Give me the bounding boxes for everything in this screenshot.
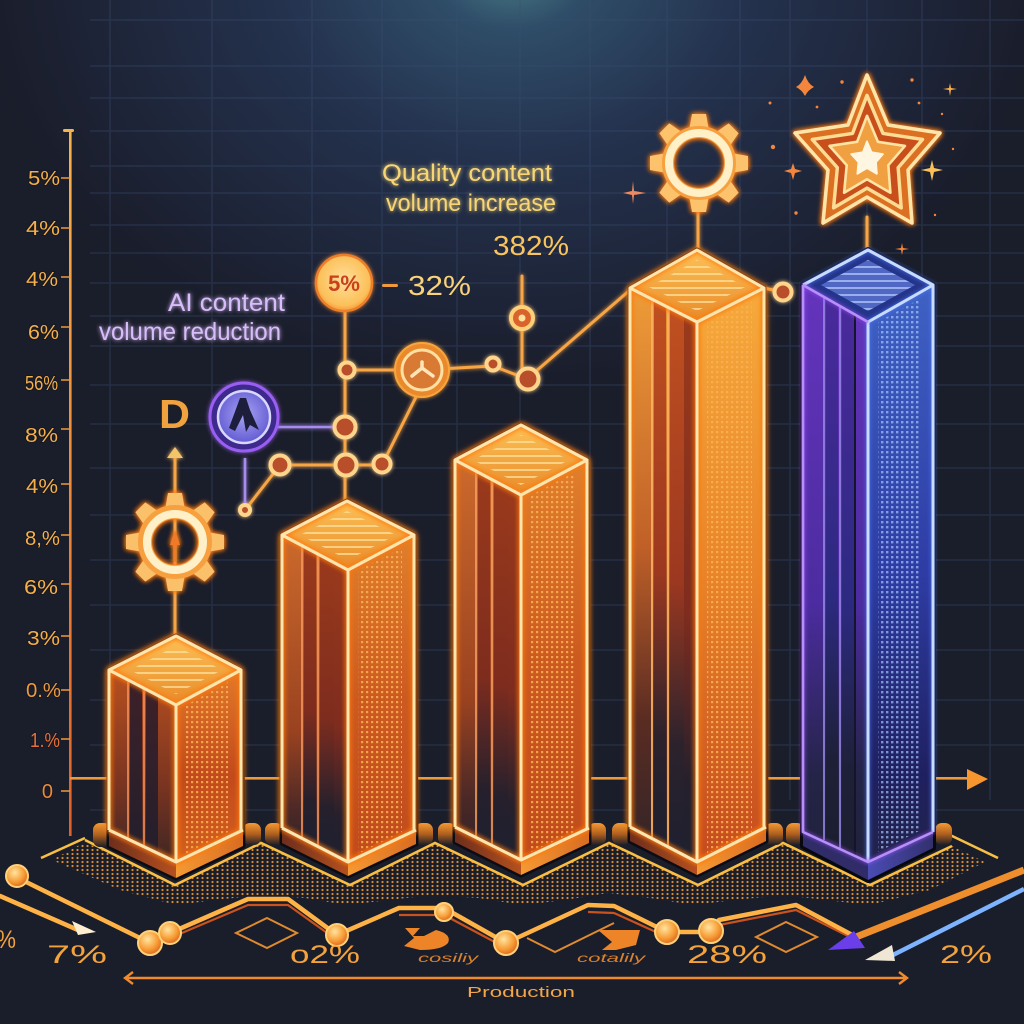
small captions bbox=[418, 951, 647, 965]
bar 1 bbox=[109, 636, 243, 878]
sparkles bbox=[623, 75, 957, 255]
small captions: cotalily bbox=[577, 951, 647, 965]
icon: star bbox=[795, 75, 940, 223]
badge: 5% bbox=[316, 255, 372, 311]
letter D: D bbox=[159, 391, 190, 437]
y axis tick labels: 8% bbox=[25, 425, 58, 447]
y axis tick labels: 4% bbox=[26, 269, 58, 291]
y axis tick labels: 5% bbox=[28, 168, 60, 190]
bottom trend line bbox=[0, 865, 1024, 961]
bottom value labels bbox=[0, 926, 992, 969]
left trend segments bbox=[0, 877, 150, 943]
bottom value labels: o2% bbox=[290, 941, 360, 969]
bottom value labels: 28% bbox=[687, 941, 767, 969]
y axis tick labels bbox=[24, 168, 61, 803]
y axis tick labels: 0 bbox=[42, 781, 53, 803]
y axis tick labels: 56% bbox=[25, 373, 58, 395]
icon: gear left bbox=[126, 493, 224, 591]
badge: 5%: 5% bbox=[328, 271, 360, 296]
value: 382%: 382% bbox=[493, 230, 569, 261]
purple connector lines bbox=[245, 427, 335, 505]
label: AI content volume reduction bbox=[99, 289, 285, 346]
label: quality content volume increase: Quality content bbox=[382, 160, 552, 187]
label: quality content volume increase bbox=[382, 160, 556, 217]
y axis tick labels: 1.% bbox=[30, 730, 60, 752]
y axis tick labels: 8,% bbox=[25, 528, 60, 550]
y axis tick labels: 6% bbox=[24, 577, 58, 599]
bar 5 bbox=[803, 250, 933, 880]
y axis tick labels: 6% bbox=[28, 322, 59, 344]
y axis tick labels: 0.% bbox=[26, 680, 61, 702]
y axis bbox=[24, 129, 74, 836]
production label: Production bbox=[467, 984, 575, 1001]
icon: gear right bbox=[650, 114, 748, 212]
y axis tick labels: 3% bbox=[27, 628, 60, 650]
production range arrow bbox=[125, 972, 907, 984]
base pads bbox=[93, 823, 952, 847]
trend diamonds bbox=[236, 918, 817, 952]
bottom value labels: 2% bbox=[940, 941, 992, 969]
y axis tick labels: 4% bbox=[26, 476, 58, 498]
value: 32% with dash: 32% bbox=[408, 270, 471, 301]
label: AI content volume reduction: AI content bbox=[168, 289, 285, 317]
y axis tick labels: 4% bbox=[26, 218, 60, 240]
bar 2 bbox=[282, 501, 416, 876]
gear arrow bbox=[170, 530, 180, 562]
badge: purple icon bbox=[210, 383, 278, 451]
value: 32% with dash bbox=[382, 270, 471, 301]
bar 3 bbox=[455, 425, 589, 875]
label: quality content volume increase: volume increase bbox=[386, 190, 556, 217]
trend nodes bbox=[6, 865, 723, 955]
x axis arrow bbox=[70, 769, 988, 790]
badge: orange chevron icon bbox=[395, 343, 449, 397]
bottom value labels: 7% bbox=[47, 941, 107, 969]
pencil lines bbox=[856, 870, 1024, 937]
label: AI content volume reduction: volume reduction bbox=[99, 318, 281, 346]
trend icons bbox=[404, 928, 640, 950]
ground zigzag with dots bbox=[41, 823, 998, 905]
connector wires and nodes bbox=[167, 212, 867, 636]
small captions: cosiliy bbox=[418, 951, 480, 965]
bar 4 bbox=[630, 250, 766, 875]
